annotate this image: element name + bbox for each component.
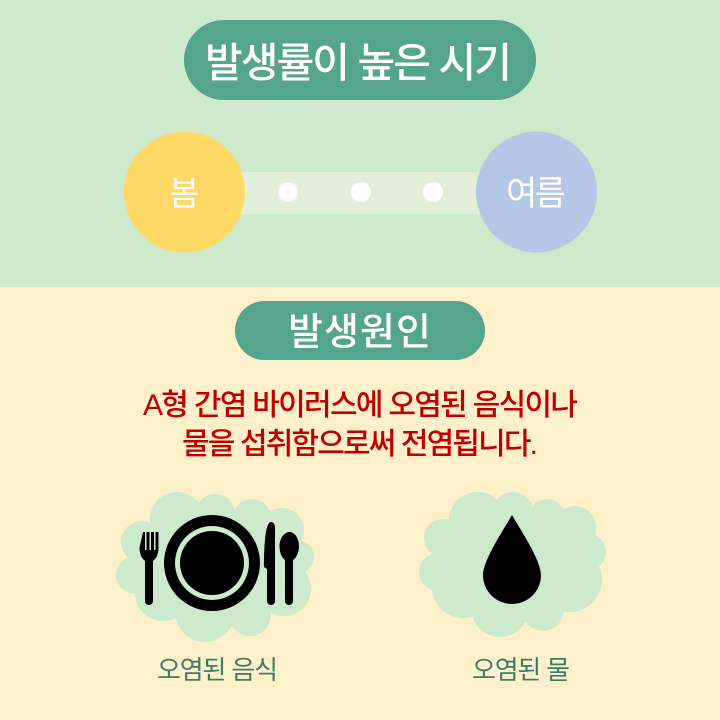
icon: plate [164, 515, 260, 611]
description text [143, 389, 578, 461]
heading: high incidence season [184, 20, 536, 100]
icon: knife [264, 522, 275, 605]
icon: cloud behind water [419, 492, 606, 637]
description text: A형 간염 바이러스에 오염된 음식이나 [143, 389, 578, 422]
water item [419, 492, 606, 685]
season timeline [124, 132, 597, 252]
heading: high incidence season: 발생률이 높은 시기 [205, 40, 512, 86]
panel: cause [116, 301, 606, 685]
icon: water drop [483, 515, 541, 604]
summer circle [476, 132, 597, 252]
food item [116, 492, 314, 685]
panel: season [0, 0, 720, 287]
description text: 물을 섭취함으로써 전염됩니다. [182, 428, 538, 461]
label: contaminated water: 오염된 물 [472, 655, 570, 685]
spring circle [124, 132, 245, 252]
summer circle: 여름 [506, 175, 566, 213]
icon: spoon [280, 532, 299, 605]
icon: fork [140, 532, 158, 605]
heading: cause: 발생원인 [288, 312, 431, 354]
label: contaminated food: 오염된 음식 [157, 655, 278, 685]
spring circle: 봄 [169, 175, 199, 212]
icon: cloud behind food [116, 492, 314, 642]
heading: cause [235, 301, 485, 360]
